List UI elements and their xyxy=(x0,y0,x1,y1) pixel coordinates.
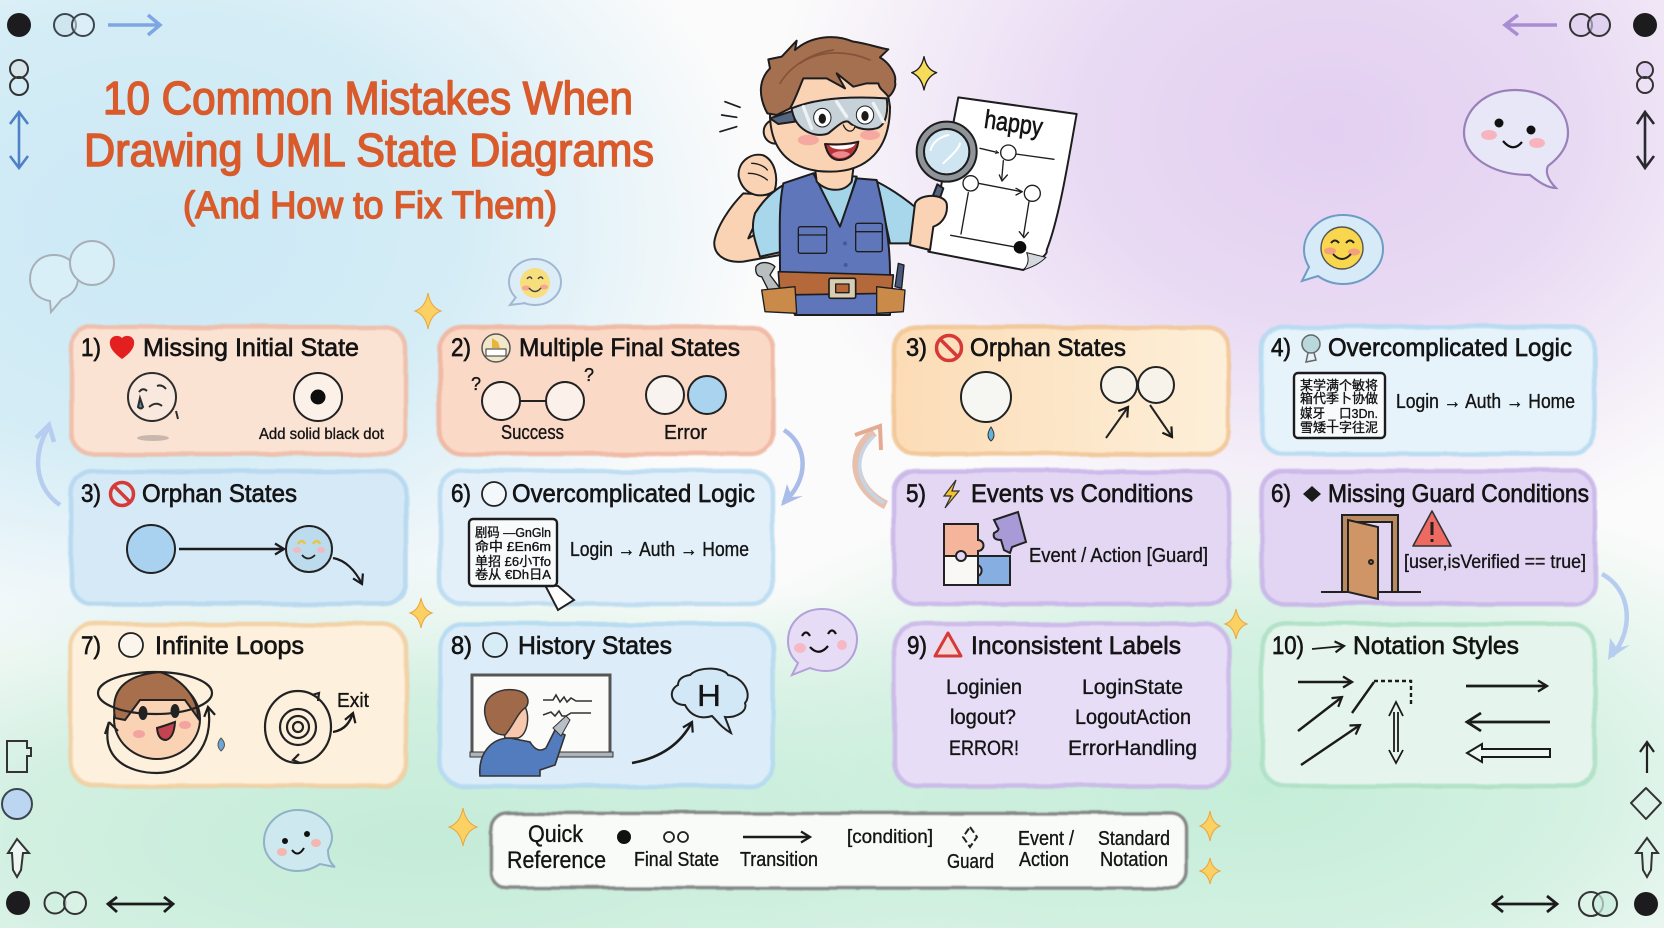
panel: 1 missing initial state: 1) xyxy=(81,334,101,362)
panel: 6 overcomplicated logic: 6) xyxy=(451,480,471,508)
icon: keyhole xyxy=(1302,335,1320,362)
panel: 6 overcomplicated logic: Overcomplicated Logic xyxy=(512,480,755,508)
icon: circle xyxy=(483,633,507,657)
sparkles xyxy=(410,293,1247,884)
caption: Add solid black dot xyxy=(259,426,385,443)
flow text: Login → Auth → Home xyxy=(570,539,749,561)
icon: circle xyxy=(119,633,143,657)
panel: 4 overcomplicated logic: 4) xyxy=(1271,334,1291,362)
panel: 6 missing guard conditions xyxy=(1262,471,1595,604)
icon: lightning xyxy=(944,480,959,508)
labels: Success xyxy=(501,422,564,444)
warning triangle xyxy=(1413,511,1451,546)
icon: diamond xyxy=(1303,486,1321,502)
orbit lines xyxy=(98,672,212,773)
label: final state: Final State xyxy=(634,849,719,871)
shadow xyxy=(137,435,169,441)
icon: crying face xyxy=(128,373,178,421)
panel: 3 orphan states blue xyxy=(71,471,406,604)
hero: engineer with goggles, magnifier and state diagram: happy xyxy=(982,104,1045,142)
spiral target xyxy=(265,691,331,763)
consistent names xyxy=(1068,676,1197,760)
corner icons: bottom right xyxy=(1493,742,1661,916)
arrow styles: right group xyxy=(1466,686,1550,762)
cloud with H: H xyxy=(697,678,721,713)
state pair with question marks xyxy=(482,382,584,420)
panel: 6 missing guard conditions: Missing Guard Conditions xyxy=(1328,480,1589,508)
quick reference xyxy=(491,813,1187,888)
speech bubble: large top right xyxy=(1464,90,1568,188)
corner icons: top right xyxy=(1505,13,1657,168)
panel: 5 events vs conditions: 5) xyxy=(906,480,926,508)
door xyxy=(1321,515,1421,599)
heading: Reference xyxy=(507,847,606,874)
inconsistent names: Loginien xyxy=(946,676,1022,699)
label: guard: Guard xyxy=(947,851,994,873)
panel: 3 orphan states orange xyxy=(894,327,1229,454)
whiteboard and person xyxy=(470,675,613,776)
speech bubble: purple xyxy=(788,609,857,675)
speech bubble: blue bottom xyxy=(264,810,335,871)
notation text: Event / Action [Guard] xyxy=(1029,545,1208,567)
icon: initial dot xyxy=(617,830,631,844)
curved arrow xyxy=(333,558,362,584)
guard text: [user,isVerified == true] xyxy=(1404,552,1586,573)
icon: arrow xyxy=(1312,646,1344,649)
label: event action: Action xyxy=(1019,849,1069,871)
flow arrow: right blue xyxy=(1602,574,1630,660)
panel: 7 infinite loops: Infinite Loops xyxy=(155,632,304,660)
panel: 9 inconsistent labels: 9) xyxy=(907,632,927,660)
label: standard notation: Standard xyxy=(1098,828,1170,850)
label: transition: Transition xyxy=(740,849,818,871)
dizzy face xyxy=(114,672,200,759)
icon: circle xyxy=(482,482,506,506)
dense note: 箱代季卜协做 xyxy=(1300,391,1378,406)
panel: 10 notation styles: Notation Styles xyxy=(1353,632,1519,660)
corner icons: top left xyxy=(7,13,160,168)
messy note: 单招 £6小Tfo xyxy=(475,554,551,569)
panel: 8 history states: 8) xyxy=(451,632,472,660)
arrow styles: left group xyxy=(1298,681,1411,765)
panel: 1 missing initial state xyxy=(71,327,406,454)
speech bubble: medium emoji xyxy=(1302,215,1383,284)
dense note: 某学满个敏将 xyxy=(1300,378,1378,393)
dense note: 媒牙 _ 口3Dn. xyxy=(1300,406,1378,421)
arrow xyxy=(632,722,692,763)
icon: heart xyxy=(110,336,134,359)
corner icons: bottom left xyxy=(2,741,173,915)
icon: guard xyxy=(963,827,977,847)
question marks xyxy=(471,365,594,394)
icon: warning xyxy=(935,633,961,656)
state with drop xyxy=(961,372,1011,441)
labels xyxy=(501,422,707,444)
label: event action xyxy=(1018,828,1074,871)
messy note xyxy=(469,519,574,610)
panel: 10 notation styles xyxy=(1262,624,1595,786)
flow arrow: left blue xyxy=(36,425,60,505)
panel: 3 orphan states blue: 3) xyxy=(81,480,101,508)
speech bubbles: empty pair xyxy=(30,241,114,312)
panel: 4 overcomplicated logic xyxy=(1262,327,1595,454)
cloud with H xyxy=(672,669,748,733)
labels: Error xyxy=(664,422,707,444)
panel: 5 events vs conditions: Events vs Conditions xyxy=(971,480,1193,508)
arrow xyxy=(179,548,284,550)
initial state dot xyxy=(294,373,342,421)
dense note: 雪矮十字往泥 xyxy=(1300,420,1378,435)
panel: 3 orphan states orange: Orphan States xyxy=(970,334,1126,362)
label: standard notation: Notation xyxy=(1100,849,1168,871)
panel: 1 missing initial state: Missing Initial State xyxy=(143,334,359,362)
inconsistent names: logout? xyxy=(950,706,1016,729)
panel: 5 events vs conditions xyxy=(894,471,1229,604)
flow arrow: centre orange xyxy=(855,426,886,505)
puzzle xyxy=(944,512,1026,585)
heading: Quick xyxy=(528,821,584,848)
panel: 2 multiple final states: Multiple Final States xyxy=(519,334,740,362)
final states pair xyxy=(646,376,726,414)
panel: 10 notation styles: 10) xyxy=(1272,632,1304,660)
title: 10 Common Mistakes When xyxy=(103,72,633,124)
speech bubble: small smiley xyxy=(509,259,561,305)
inconsistent names xyxy=(946,676,1022,760)
smiling state xyxy=(286,526,332,572)
label: condition: [condition] xyxy=(847,827,933,848)
icon: no sign xyxy=(110,482,134,506)
panel: 7 infinite loops: 7) xyxy=(81,632,101,660)
dense note xyxy=(1294,373,1385,438)
icon: badge xyxy=(482,334,510,362)
title: (And How to Fix Them) xyxy=(183,185,557,227)
panel: 6 overcomplicated logic xyxy=(440,471,773,610)
exit label: Exit xyxy=(337,690,369,712)
title xyxy=(84,72,654,227)
flow text: Login → Auth → Home xyxy=(1396,391,1575,413)
panel: 7 infinite loops xyxy=(71,624,406,786)
consistent names: ErrorHandling xyxy=(1068,737,1197,760)
panel: 6 missing guard conditions: 6) xyxy=(1271,480,1291,508)
panel: 9 inconsistent labels: Inconsistent Labels xyxy=(971,632,1181,660)
messy note: 剧码 —GnGln xyxy=(475,525,551,540)
connected states xyxy=(1101,367,1174,438)
question marks: ? xyxy=(584,365,594,385)
panel: 3 orphan states blue: Orphan States xyxy=(142,480,297,508)
consistent names: LogoutAction xyxy=(1075,706,1191,729)
panel: 2 multiple final states xyxy=(440,327,773,454)
flow arrow: centre blue xyxy=(781,430,803,506)
consistent names: LoginState xyxy=(1082,676,1183,699)
panel: 9 inconsistent labels xyxy=(894,624,1229,786)
panel: 2 multiple final states: 2) xyxy=(451,334,471,362)
label: standard notation xyxy=(1098,828,1170,871)
messy note: 命中 £En6m xyxy=(475,539,551,554)
hero: engineer with goggles, magnifier and state diagram xyxy=(714,37,1077,315)
icon: no sign xyxy=(936,336,962,360)
messy note: 卷从 €Dh日A xyxy=(475,567,551,582)
inconsistent names: ERROR! xyxy=(949,737,1019,760)
panel: 8 history states xyxy=(440,624,773,786)
sweat drop xyxy=(218,738,224,751)
heading xyxy=(507,821,606,874)
icon: transition arrow xyxy=(743,836,810,838)
label: event action: Event / xyxy=(1018,828,1074,850)
icon: final state xyxy=(664,832,688,842)
state circle xyxy=(127,525,175,573)
panel: 3 orphan states orange: 3) xyxy=(906,334,927,362)
panel: 8 history states: History States xyxy=(518,632,672,660)
title: Drawing UML State Diagrams xyxy=(84,124,654,176)
exit arrow xyxy=(333,713,353,732)
panel: 4 overcomplicated logic: Overcomplicated Logic xyxy=(1328,334,1572,362)
question marks: ? xyxy=(471,374,481,394)
